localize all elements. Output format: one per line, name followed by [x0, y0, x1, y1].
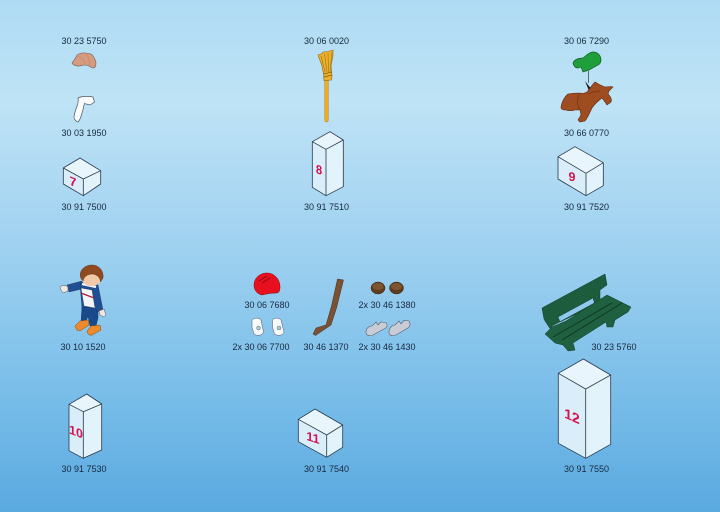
box 9	[558, 147, 603, 196]
box 7: 7	[70, 173, 76, 190]
box 7	[63, 158, 101, 196]
label: 30 91 7510: 30 91 7510	[304, 202, 349, 212]
box 12	[558, 359, 611, 458]
label: 30 06 0020: 30 06 0020	[304, 36, 349, 46]
icon: cap	[72, 53, 96, 68]
box 9: 9	[569, 170, 575, 184]
label: 2x 30 46 1430: 2x 30 46 1430	[358, 342, 416, 352]
box 11	[298, 409, 343, 457]
label: 30 06 7290: 30 06 7290	[564, 36, 609, 46]
label: 30 91 7550: 30 91 7550	[564, 464, 609, 474]
box 10	[69, 394, 102, 458]
icon: broom	[318, 50, 333, 122]
label: 30 23 5760: 30 23 5760	[591, 342, 637, 352]
box 11: 11	[306, 428, 320, 447]
label: 30 91 7500: 30 91 7500	[61, 202, 107, 212]
icon: brown dog	[561, 82, 613, 122]
label: 2x 30 46 1380: 2x 30 46 1380	[358, 300, 416, 310]
icon: skates	[366, 320, 410, 336]
box 8	[312, 132, 343, 196]
icon: white pads	[252, 318, 284, 335]
icon: hockey stick	[313, 279, 344, 336]
label: 30 03 1950: 30 03 1950	[61, 128, 107, 138]
label: 30 10 1520: 30 10 1520	[60, 342, 106, 352]
label: 2x 30 06 7700: 2x 30 06 7700	[232, 342, 290, 352]
label: 30 46 1370: 30 46 1370	[303, 342, 349, 352]
box 10: 10	[69, 422, 83, 442]
icon: boy figure	[60, 265, 106, 336]
box 12: 12	[564, 406, 580, 428]
label: 30 91 7540: 30 91 7540	[304, 464, 349, 474]
icon: white scarf	[74, 96, 94, 122]
label: 30 91 7520: 30 91 7520	[564, 202, 609, 212]
label: 30 66 0770: 30 66 0770	[564, 128, 609, 138]
icon: pucks	[371, 282, 404, 294]
icon: green dog coat and arrow	[573, 52, 601, 90]
label: 30 23 5750: 30 23 5750	[61, 36, 107, 46]
label: 30 91 7530: 30 91 7530	[61, 464, 107, 474]
icon: red helmet	[254, 273, 280, 295]
icon: green bench	[542, 274, 631, 351]
label: 30 06 7680: 30 06 7680	[244, 300, 290, 310]
box 8: 8	[316, 162, 322, 178]
